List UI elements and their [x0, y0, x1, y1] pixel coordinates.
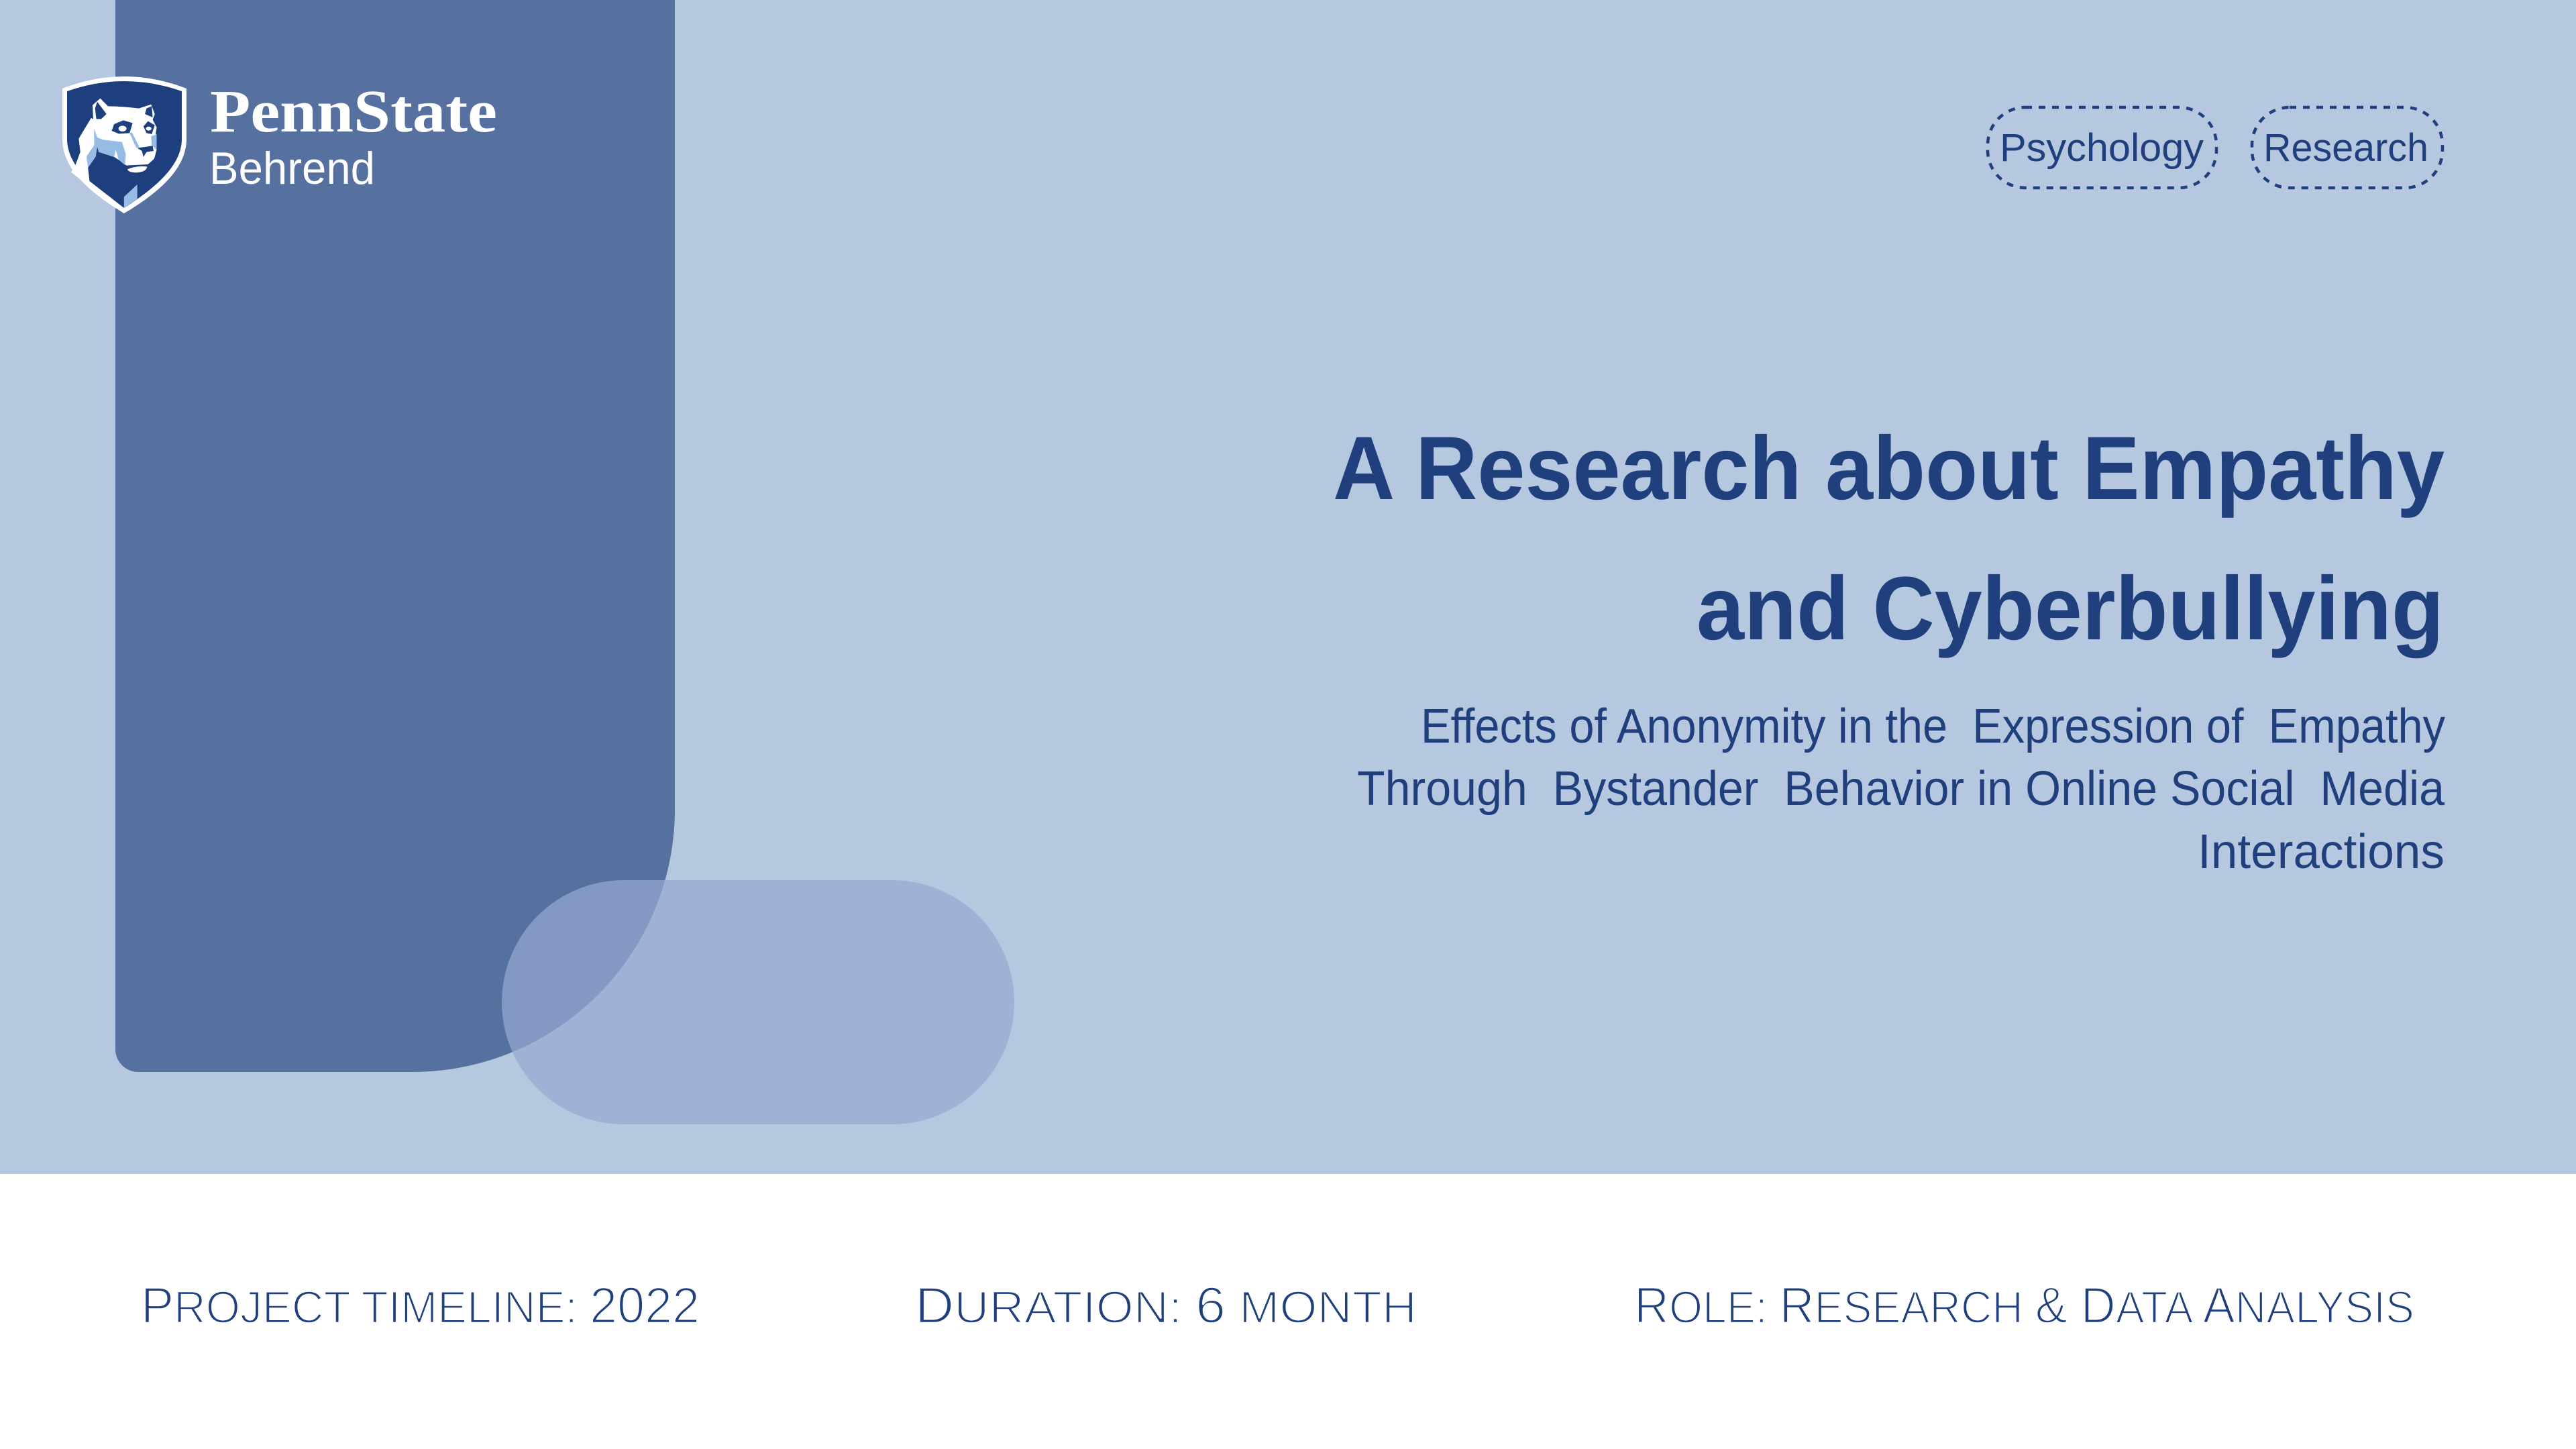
shape: translucent pill	[502, 880, 1014, 1124]
tag: Research: Research	[2263, 126, 2428, 170]
logo: Penn State Behrend	[62, 76, 497, 213]
subtitle: Effects of Anonymity in the Expression of Empathy	[1421, 700, 2445, 753]
footer: role: ROLE: RESEARCH & DATA ANALYSIS	[1634, 1277, 2414, 1334]
title: and Cyberbullying	[1697, 559, 2444, 659]
logo wordmark: PennState: PennState	[210, 78, 497, 145]
title: A Research about Empathy	[1333, 419, 2445, 519]
footer: duration: DURATION: 6 MONTH	[915, 1277, 1417, 1334]
footer: project timeline: PROJECT TIMELINE: 2022	[141, 1277, 700, 1334]
tag: Psychology: Psychology	[2000, 126, 2204, 170]
title	[1333, 419, 2445, 659]
logo wordmark: Behrend: Behrend	[209, 143, 375, 194]
tag: Research	[2252, 107, 2443, 188]
shape: dark blue rounded panel	[115, 0, 675, 1072]
tag: Psychology	[1988, 107, 2216, 188]
subtitle: Through Bystander Behavior in Online Social Media	[1357, 762, 2445, 816]
subtitle: Interactions	[2198, 825, 2445, 879]
icon: shield with lion	[62, 76, 186, 213]
subtitle	[1357, 700, 2445, 879]
panel: footer background	[0, 1174, 2576, 1449]
